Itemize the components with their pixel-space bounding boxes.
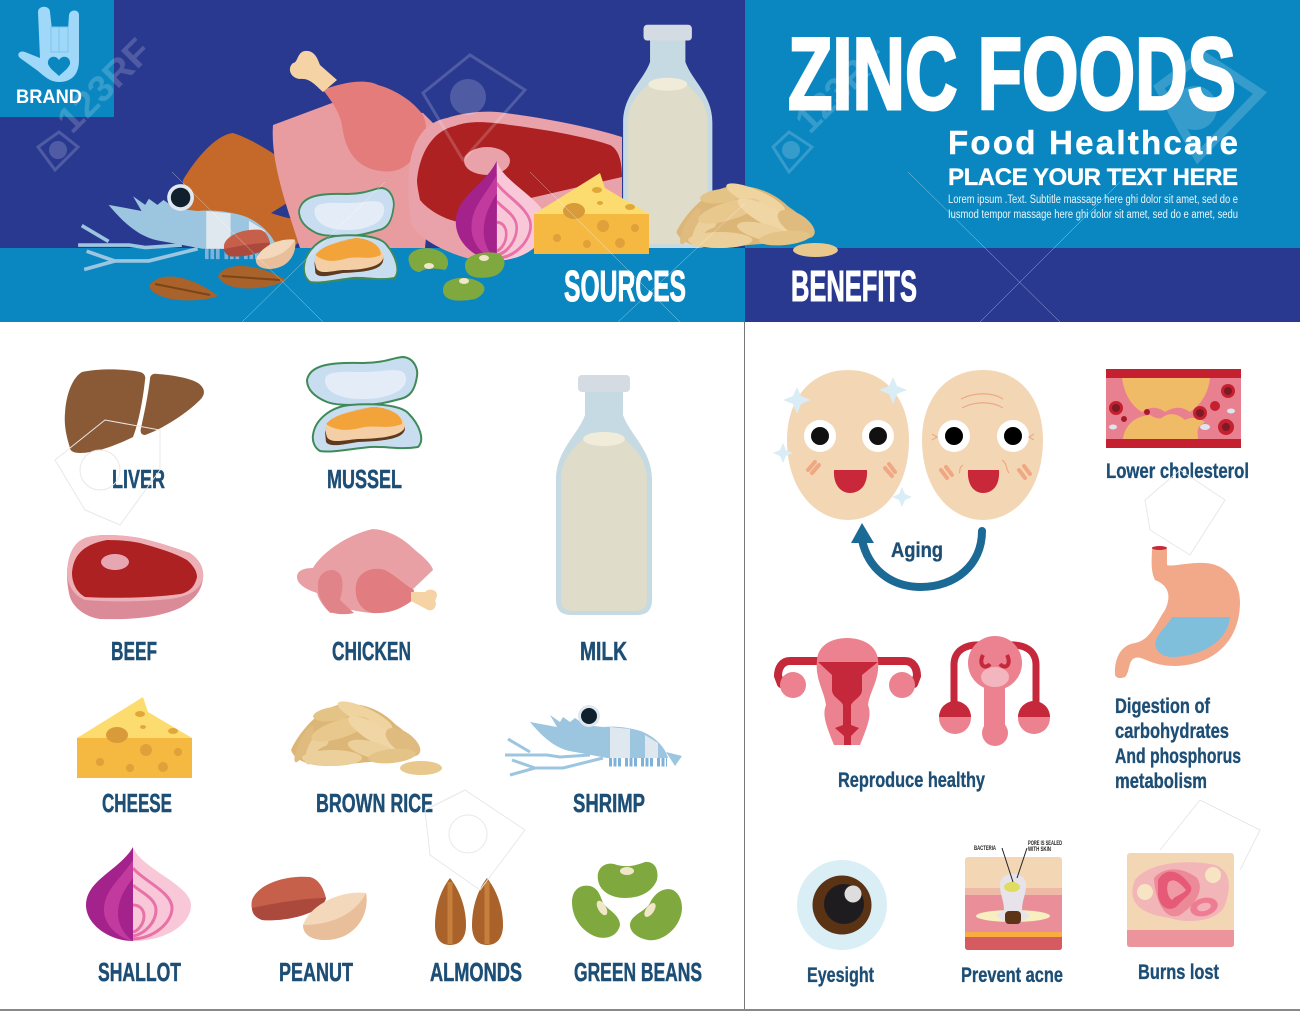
hero: cheese bbox=[534, 173, 649, 254]
subtitle: Food Healthcare bbox=[948, 124, 1238, 161]
watermark lines bbox=[172, 172, 1120, 322]
icon: acne skin bbox=[965, 848, 1062, 950]
label: milk: MILK bbox=[580, 636, 627, 666]
icon: milk bottle bbox=[556, 375, 652, 615]
icon: burn skin bbox=[1127, 853, 1234, 947]
small label: pore: WITH SKIN bbox=[1028, 847, 1051, 853]
label: shallot: SHALLOT bbox=[98, 957, 181, 987]
icon: young face bbox=[773, 370, 912, 520]
icon: eye bbox=[797, 860, 887, 950]
icon: peanut bbox=[251, 877, 367, 940]
label: liver: LIVER bbox=[112, 464, 165, 494]
label: eyesight: Eyesight bbox=[807, 964, 874, 987]
label: shrimp: SHRIMP bbox=[573, 788, 645, 818]
icon: brown rice bbox=[291, 696, 442, 775]
small label: pore: PORE IS SEALED bbox=[1028, 841, 1062, 847]
hero: beef bbox=[408, 112, 622, 260]
label: digestion: carbohydrates bbox=[1115, 720, 1229, 743]
icon: beef bbox=[67, 535, 203, 619]
icon: male reproductive bbox=[939, 636, 1050, 746]
hero: milk bottle bbox=[623, 25, 712, 248]
small label: pore bbox=[1028, 841, 1062, 853]
label: beef: BEEF bbox=[111, 636, 157, 666]
label: digestion: metabolism bbox=[1115, 770, 1207, 793]
hero: almonds bbox=[149, 266, 286, 300]
label: aging: Aging bbox=[891, 539, 943, 562]
hero: shallot bbox=[456, 161, 547, 260]
small label: bacteria: BACTERIA bbox=[974, 846, 996, 852]
label: prevent acne: Prevent acne bbox=[961, 964, 1063, 987]
label: brown rice: BROWN RICE bbox=[316, 788, 433, 818]
label: peanut: PEANUT bbox=[279, 957, 353, 987]
hero: rice bbox=[676, 178, 838, 257]
watermarks: 123RF bbox=[49, 30, 159, 141]
label: chicken: CHICKEN bbox=[332, 636, 411, 666]
icon: mussel bbox=[307, 357, 421, 452]
label: mussel: MUSSEL bbox=[327, 464, 402, 494]
hero: shrimp bbox=[78, 184, 294, 270]
lorem text: Lorem ipsum .Text. Subtitle massage here ghi dolor sit amet, sed do e bbox=[948, 194, 1238, 206]
hero: chicken bbox=[273, 51, 437, 248]
watermark outlines on white bbox=[55, 420, 1260, 890]
brand badge bbox=[0, 0, 114, 117]
watermarks bbox=[38, 30, 1260, 172]
hero: liver bbox=[183, 133, 328, 246]
label: digestion: Digestion of bbox=[1115, 695, 1211, 718]
icon: stomach bbox=[1115, 546, 1240, 678]
watermarks: 123RF bbox=[787, 34, 893, 141]
icon: chicken bbox=[297, 529, 437, 614]
header backgrounds bbox=[0, 0, 1300, 322]
hero: peanut bbox=[224, 230, 295, 269]
label: almonds: ALMONDS bbox=[430, 957, 522, 987]
icon: artery bbox=[1106, 369, 1241, 448]
brand label: BRAND bbox=[16, 87, 82, 108]
lorem text bbox=[948, 194, 1238, 221]
arrow: aging bbox=[851, 523, 982, 587]
icon: love hand bbox=[18, 7, 79, 82]
hero: beans bbox=[408, 248, 505, 301]
icon: liver bbox=[65, 369, 204, 453]
label: digestion: And phosphorus bbox=[1115, 745, 1241, 768]
lorem text: Iusmod tempor massage here ghi dolor sit amet, sed do e amet, sedu bbox=[948, 209, 1238, 221]
sources heading: SOURCES bbox=[564, 262, 686, 311]
panel: benefits bbox=[773, 369, 1249, 987]
label: green beans: GREEN BEANS bbox=[574, 957, 702, 987]
label: cheese: CHEESE bbox=[102, 788, 172, 818]
icon: cheese bbox=[77, 697, 192, 778]
icon: almonds bbox=[435, 878, 503, 945]
icon: shrimp bbox=[505, 705, 682, 775]
benefits heading: BENEFITS bbox=[791, 262, 917, 311]
icon: female reproductive bbox=[778, 638, 917, 745]
label: burns lost: Burns lost bbox=[1138, 961, 1219, 984]
icon: green beans bbox=[572, 862, 682, 940]
panel: sources bbox=[65, 357, 702, 987]
icon: shallot bbox=[86, 847, 191, 941]
icon: old face bbox=[922, 370, 1043, 520]
label: digestion bbox=[1115, 695, 1241, 793]
label: lower cholesterol: Lower cholesterol bbox=[1106, 460, 1249, 483]
tagline: PLACE YOUR TEXT HERE bbox=[948, 164, 1238, 191]
hero: mussel bbox=[299, 188, 397, 283]
hero food pile bbox=[78, 25, 838, 301]
label: reproduce healthy: Reproduce healthy bbox=[838, 769, 985, 792]
